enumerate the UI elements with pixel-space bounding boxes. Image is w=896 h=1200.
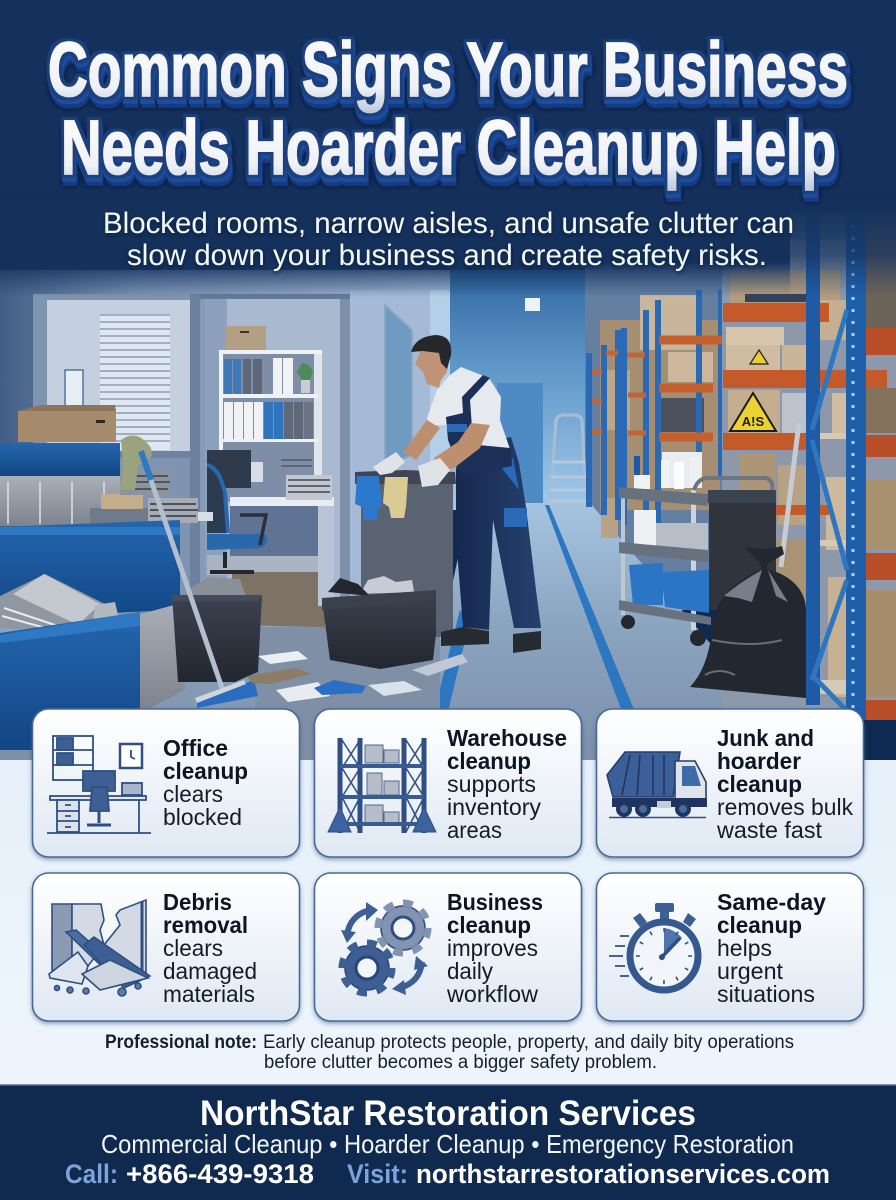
desk clutter: [90, 436, 213, 526]
card text: same-day cleanup: cleanup: [717, 912, 802, 938]
broom: [141, 451, 258, 708]
icon: stopwatch: [609, 903, 698, 990]
subtitle line 2: slow down your business and create safety risks.: [127, 239, 767, 272]
card text: business cleanup: cleanup: [447, 912, 531, 938]
card text: warehouse cleanup: [447, 725, 567, 843]
card text: same-day cleanup: urgent: [717, 958, 783, 984]
card text: office cleanup: Office: [163, 735, 228, 761]
contact line: northstarrestorationservices.com: [416, 1159, 830, 1189]
icon: gears and arrows: [341, 902, 428, 995]
black trash bag stand: [708, 490, 776, 610]
contact line: Visit:: [347, 1159, 408, 1189]
card text: junk and hoarder cleanup: waste fast: [716, 817, 822, 843]
warehouse shelving far aisle: [589, 290, 729, 540]
professional note: before clutter becomes a bigger safety problem.: [264, 1052, 657, 1073]
card text: junk and hoarder cleanup: removes bulk: [717, 794, 853, 820]
worker in navy overalls: [373, 335, 541, 653]
dark tote with trash bags: [322, 576, 436, 669]
card text: office cleanup: [163, 735, 248, 830]
card text: warehouse cleanup: cleanup: [447, 748, 531, 774]
panel: same-day cleanup: [596, 873, 864, 1021]
card text: debris removal: removal: [163, 912, 248, 938]
services line: Commercial Cleanup • Hoarder Cleanup • Emergency Restoration: [101, 1129, 794, 1159]
card text: business cleanup: daily: [447, 958, 493, 984]
warehouse background: [585, 210, 896, 610]
card text: junk and hoarder cleanup: hoarder: [717, 748, 801, 774]
subtitle: [103, 207, 794, 272]
card text: same-day cleanup: Same-day: [717, 889, 826, 915]
floor: [0, 503, 810, 760]
corridor back wall: [450, 270, 610, 510]
card text: debris removal: Debris: [163, 889, 232, 915]
lower gray bin: [130, 602, 185, 708]
paper stack: [0, 574, 122, 632]
card text: same-day cleanup: situations: [717, 981, 815, 1007]
large black garbage bag: [690, 546, 806, 698]
black tote with bags: [172, 577, 262, 682]
card text: warehouse cleanup: areas: [447, 817, 502, 843]
white shirt: [427, 367, 511, 452]
mop handle: [781, 423, 799, 567]
worker's gray bin with gloves: [355, 470, 456, 637]
card text: debris removal: damaged: [163, 958, 257, 984]
card text: junk and hoarder cleanup: Junk and: [717, 725, 814, 751]
trousers: [456, 437, 541, 630]
lower light panel: [0, 760, 896, 1085]
top fade of the scene into header left: [0, 205, 790, 297]
arms and gloves: [434, 423, 490, 472]
lower blue bin: [0, 612, 140, 750]
icon: broken wall debris: [49, 900, 150, 996]
card text: warehouse cleanup: inventory: [447, 794, 541, 820]
top navy header background: [0, 0, 896, 300]
professional note: Early cleanup protects people, property, and daily bity operations: [263, 1032, 794, 1053]
back office wall: [0, 270, 450, 760]
subtitle line 1: Blocked rooms, narrow aisles, and unsafe clutter can: [103, 207, 794, 240]
corridor door and step ladder: [497, 298, 587, 503]
card text: office cleanup: blocked: [163, 804, 242, 830]
office doorway interior: [200, 294, 350, 634]
card text: warehouse cleanup: supports: [447, 771, 536, 797]
panel: warehouse cleanup: [314, 709, 582, 857]
footer band: [0, 1084, 896, 1200]
card text: business cleanup: Business: [447, 889, 543, 915]
icon: office desk: [47, 736, 151, 833]
card text: office cleanup: clears: [163, 781, 223, 807]
warehouse shelving with boxes and warning signs: [722, 215, 896, 720]
stacked blue and gray storage bins with papers: [0, 405, 213, 750]
papers on floor: [247, 651, 468, 702]
photo scene: worker cleaning cluttered office and warehouse: [0, 205, 896, 760]
office desk monitor and chair: [207, 450, 334, 606]
card text: debris removal: [163, 889, 257, 1007]
card text: junk and hoarder cleanup: cleanup: [717, 771, 802, 797]
professional note: [105, 1032, 794, 1073]
bib and straps: [446, 375, 512, 476]
top fade of the scene into header right: [790, 205, 896, 297]
professional note: Professional note:: [105, 1032, 257, 1053]
cardboard box on stack: [18, 405, 116, 442]
large blue bin: [0, 520, 180, 620]
warehouse shelving with boxes and warning signs: A!S: [742, 414, 765, 429]
icon: warehouse racks: [328, 738, 436, 833]
boots: [441, 627, 541, 653]
card text: business cleanup: [446, 889, 543, 1007]
card text: same-day cleanup: helps: [717, 935, 772, 961]
card text: debris removal: materials: [163, 981, 255, 1007]
cleaning cart: [619, 452, 772, 646]
gray bin: [0, 476, 120, 526]
right wall with door panel: [350, 290, 450, 640]
card text: same-day cleanup: [717, 889, 826, 1007]
contact line: [65, 1159, 830, 1189]
contact line: +866-439-9318: [126, 1159, 314, 1189]
company name: NorthStar Restoration Services: [200, 1094, 696, 1133]
panel: junk and hoarder cleanup: [596, 709, 864, 857]
contact line: Call:: [65, 1159, 118, 1189]
title: [48, 27, 848, 191]
card text: business cleanup: workflow: [446, 981, 539, 1007]
panel: debris removal: [32, 873, 300, 1021]
card text: junk and hoarder cleanup: [716, 725, 853, 843]
card text: warehouse cleanup: Warehouse: [447, 725, 567, 751]
panel: office cleanup: [32, 709, 300, 857]
card text: business cleanup: improves: [447, 935, 538, 961]
icon: garbage truck: [607, 752, 707, 818]
panel: business cleanup: [314, 873, 582, 1021]
head and hair: [411, 335, 451, 388]
file shelf with binders: [219, 350, 322, 510]
card text: office cleanup: cleanup: [163, 758, 248, 784]
upper blue bin: [0, 443, 120, 476]
window partition: [33, 294, 200, 634]
card text: debris removal: clears: [163, 935, 223, 961]
